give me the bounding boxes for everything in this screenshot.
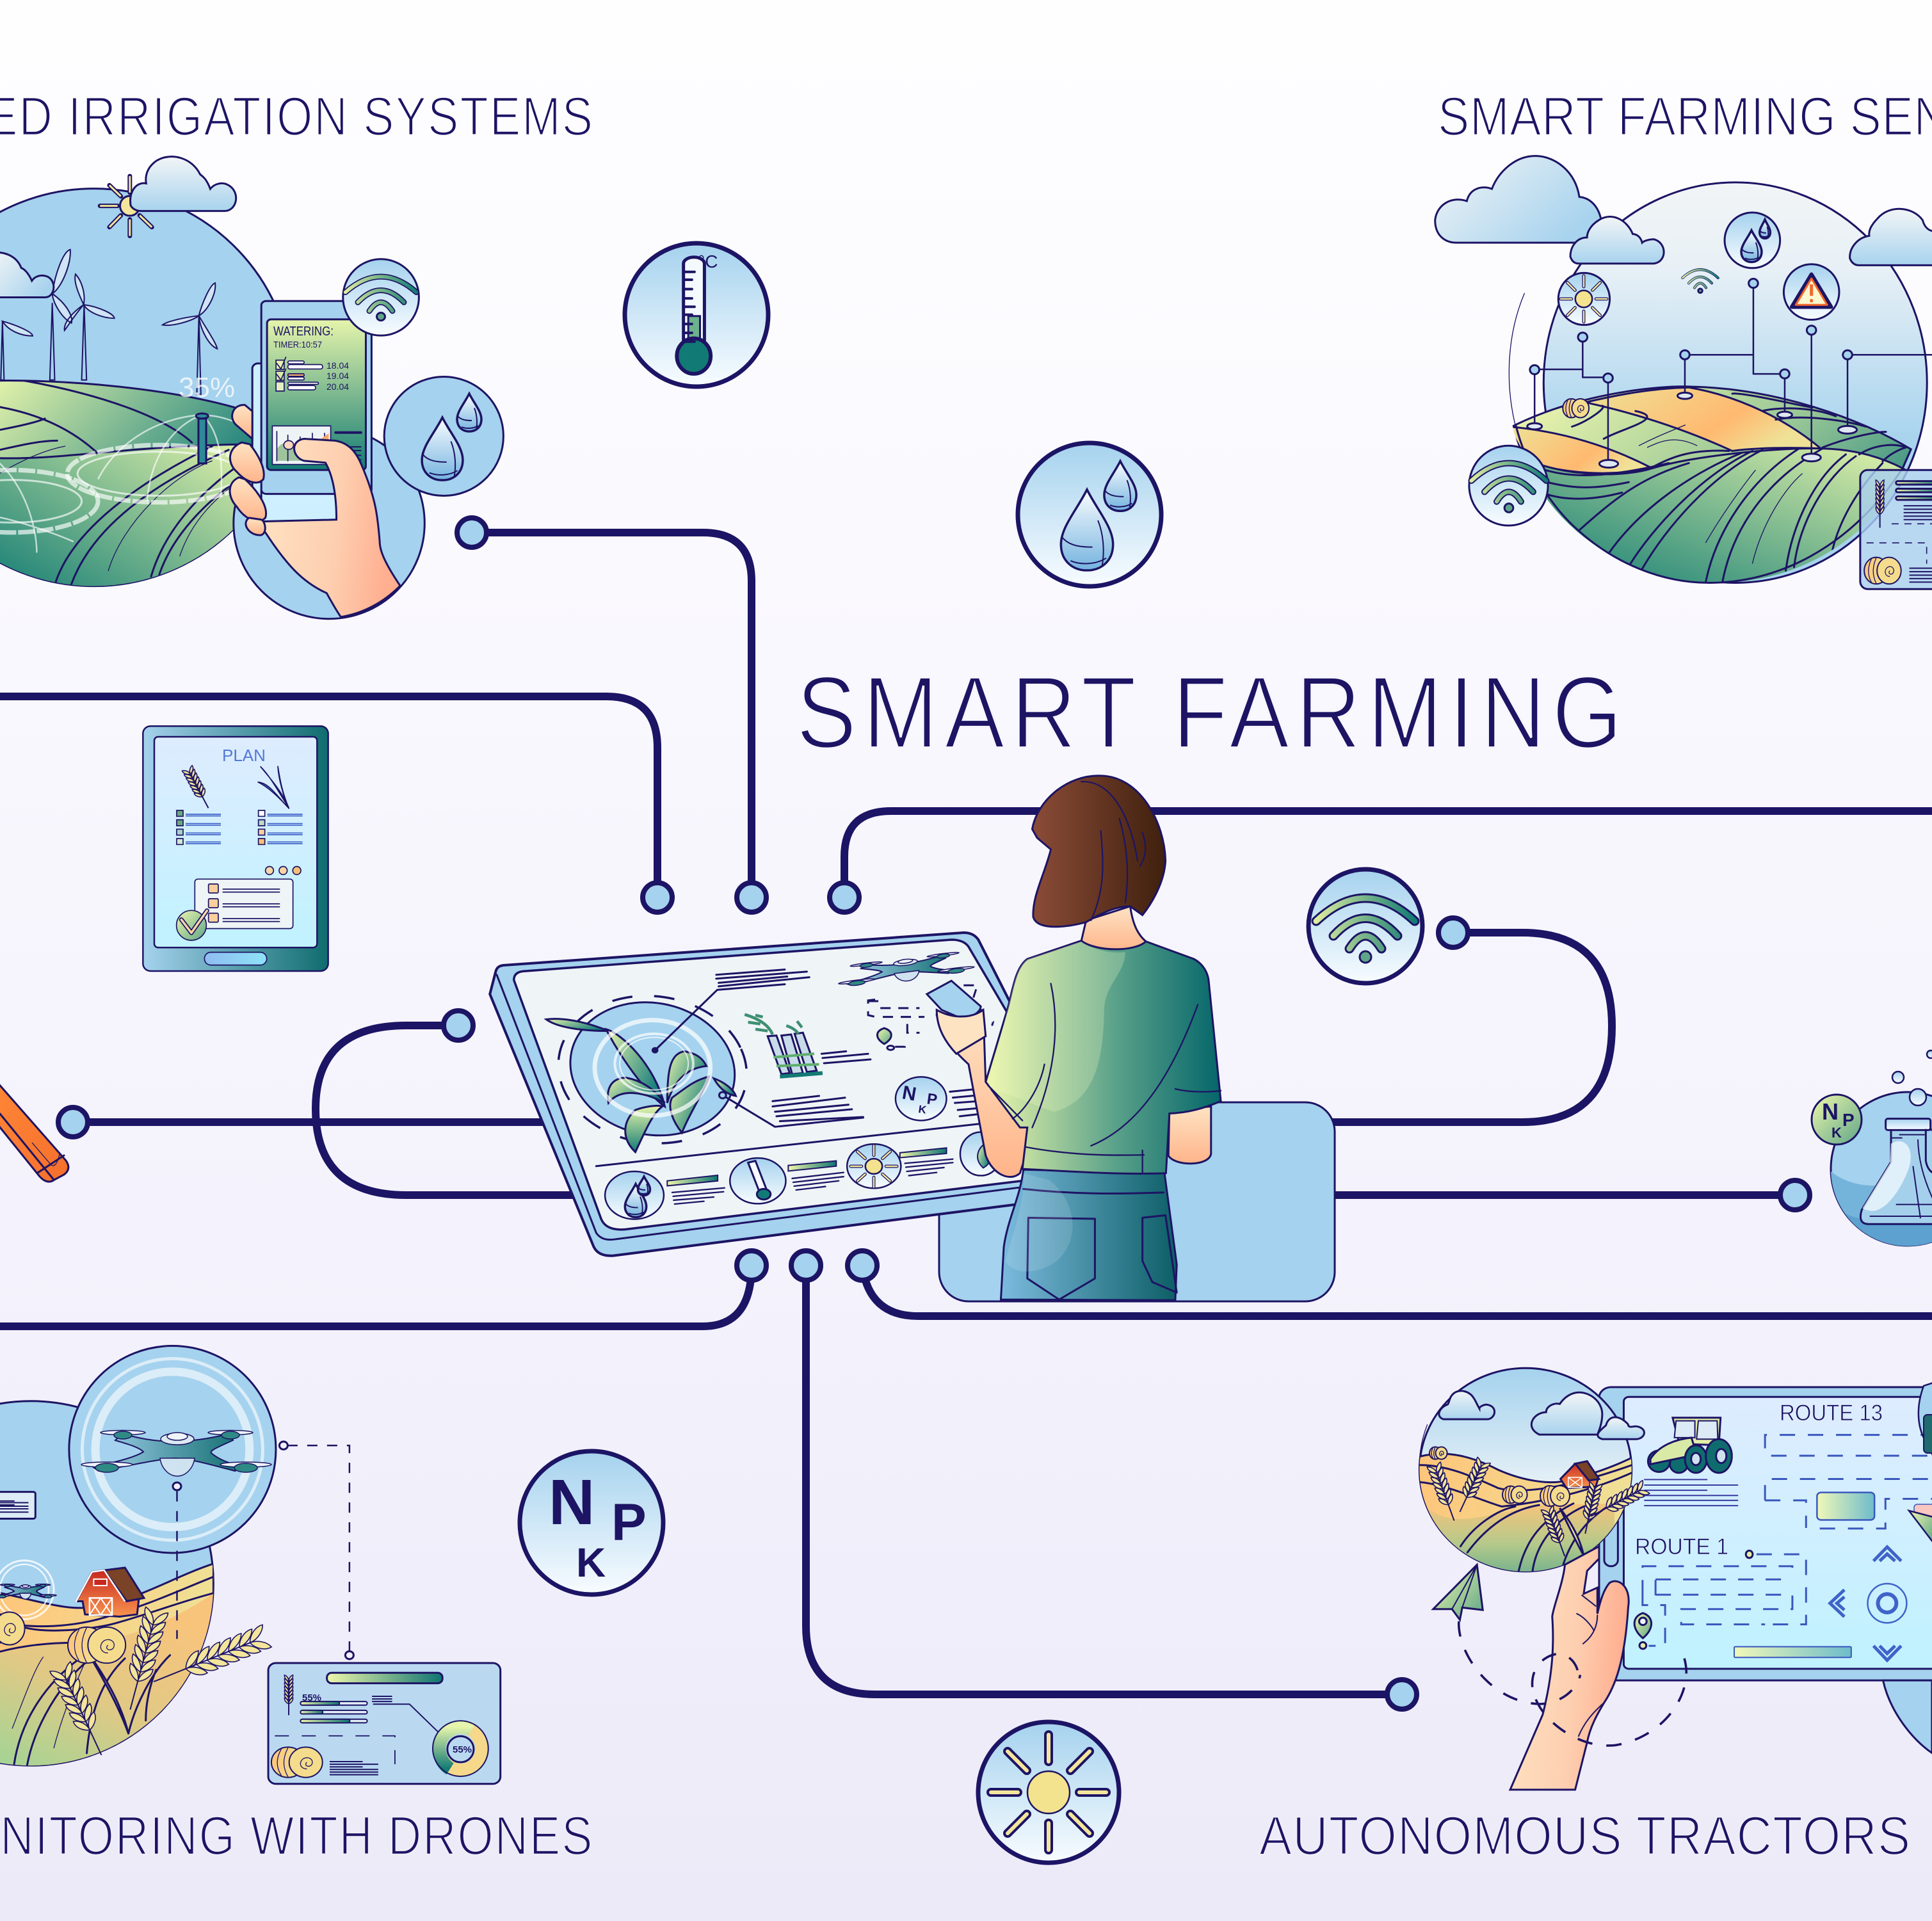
check badge <box>177 910 207 940</box>
wheat glyph <box>182 766 213 811</box>
sun with moon <box>100 176 152 236</box>
flask shape right <box>1926 1130 1932 1178</box>
panel: planning tablet <box>143 726 328 971</box>
farmer hair <box>1032 776 1166 927</box>
heading: main title: SMART FARMING <box>796 655 1622 769</box>
tablet frame <box>143 726 328 971</box>
hay bales <box>1429 1447 1570 1506</box>
deepest tone <box>1845 1214 1932 1246</box>
data card <box>268 1663 501 1784</box>
phone screen <box>267 319 366 470</box>
badge: drops <box>1725 213 1780 268</box>
screen badge drop icons <box>625 1177 650 1218</box>
icon: thermometer badge: °C <box>698 252 718 271</box>
flask body <box>1860 1130 1932 1224</box>
small drone rings <box>0 1561 54 1620</box>
phone text: 19.04 <box>326 371 349 381</box>
tablet edge <box>497 975 1027 1240</box>
wheat stalks <box>50 1607 271 1760</box>
NPK disc text: P <box>926 1090 938 1109</box>
wheat on scene <box>1427 1457 1650 1559</box>
hand creases <box>1577 1595 1604 1736</box>
top cloud <box>131 157 236 211</box>
bottom badge thermometer <box>730 1158 785 1203</box>
progress bar <box>1734 1647 1851 1657</box>
plan label: PLAN <box>222 746 266 765</box>
icon: thermometer badge <box>625 243 768 387</box>
icon: NPK badge: P <box>611 1493 647 1552</box>
drops badge <box>384 376 503 495</box>
farmer shirt <box>986 941 1221 1173</box>
phone text: WATERING: <box>273 325 334 339</box>
route node <box>1746 1550 1753 1558</box>
grass glyph <box>258 766 289 808</box>
plant circle <box>547 987 759 1151</box>
card percent labels <box>302 1692 472 1755</box>
hay bale on hill <box>1563 399 1589 418</box>
irrigation spray rings <box>0 415 241 553</box>
flask circle <box>1831 1092 1932 1246</box>
divider <box>596 1124 978 1166</box>
flask highlight <box>1863 1141 1911 1211</box>
farmer arm right <box>1168 1106 1211 1164</box>
big cloud <box>1435 156 1601 243</box>
fields <box>0 1564 213 1769</box>
icon: sensor wifi large <box>1471 463 1547 512</box>
phone back <box>252 364 337 522</box>
heading: autonomous tractors: AUTONOMOUS TRACTORS <box>1259 1806 1910 1867</box>
hand on tablet <box>1510 1547 1629 1790</box>
blue hand circle <box>234 428 424 619</box>
icon: NPK badge: K <box>576 1539 606 1586</box>
NPK disc text <box>901 1082 938 1116</box>
icon: sensor wifi small <box>1682 269 1718 293</box>
dash nodes <box>173 1442 353 1659</box>
card dash <box>275 1736 395 1771</box>
icon: orange tool <box>0 1082 68 1182</box>
shirt highlight <box>988 942 1125 1112</box>
pointer lines <box>655 985 863 1127</box>
bottom text lines <box>672 1159 953 1204</box>
phone chart <box>272 426 331 465</box>
panel: monitoring with drones <box>0 1346 501 1784</box>
fields <box>1509 387 1922 584</box>
screen badge sun icon <box>851 1146 897 1187</box>
donut <box>433 1721 488 1776</box>
icon: NPK badge <box>520 1451 663 1595</box>
connector lines <box>0 518 1932 1709</box>
badge: warning <box>1783 264 1839 320</box>
icon: small drop <box>457 394 481 431</box>
map pin <box>877 1028 894 1050</box>
farmer hair neck <box>1081 906 1146 952</box>
outer tablet <box>1599 1387 1932 1680</box>
tractor <box>1648 1418 1732 1473</box>
phone body <box>261 301 371 494</box>
icon: sun badge <box>978 1722 1119 1863</box>
dots <box>266 867 301 874</box>
map pin <box>1634 1613 1652 1649</box>
wind turbines <box>1 250 217 395</box>
card wheat <box>284 1675 293 1715</box>
card lines <box>330 1696 442 1774</box>
tablet body <box>490 933 1027 1256</box>
right cloud <box>1850 209 1932 265</box>
barn <box>1561 1461 1599 1488</box>
dashed map <box>868 985 993 1047</box>
side slot <box>1604 1516 1618 1566</box>
card text lines <box>1904 506 1932 582</box>
card dashed route <box>1867 524 1932 564</box>
plant <box>546 1019 736 1152</box>
bottom bars <box>667 1148 947 1186</box>
icon: wifi badge <box>1308 869 1422 983</box>
phone text <box>273 325 349 392</box>
big drone <box>81 1430 271 1476</box>
screen drone <box>836 950 975 990</box>
fields <box>1416 1454 1635 1577</box>
pointer node <box>719 1092 726 1098</box>
check list right <box>259 810 303 844</box>
leaf mini <box>978 1145 990 1168</box>
phone bottom <box>261 486 337 531</box>
jeans details <box>1024 1189 1177 1299</box>
NPK small badge: K <box>1831 1125 1842 1141</box>
text lines <box>716 970 978 1121</box>
text lines <box>1645 1479 1737 1506</box>
route labels: ROUTE 13 <box>1780 1401 1883 1426</box>
hand phone <box>927 981 981 1019</box>
card bars <box>300 1701 367 1723</box>
icon: water drops badge <box>1018 443 1161 586</box>
info lines <box>0 1501 28 1512</box>
NPK disc <box>896 1077 947 1120</box>
clouds <box>1439 1391 1644 1439</box>
icon: wifi <box>346 277 416 321</box>
sky circle <box>1543 182 1927 583</box>
phone small lines <box>345 447 361 460</box>
sky scene circle <box>1419 1368 1632 1571</box>
route dashes <box>1765 1435 1932 1529</box>
tablet screen <box>154 737 317 947</box>
NPK small badge: P <box>1842 1110 1855 1130</box>
NPK small badge: N <box>1822 1098 1839 1125</box>
big drone circle <box>69 1346 276 1553</box>
outline arc <box>1419 1424 1428 1479</box>
check list left <box>177 810 221 844</box>
small info card <box>0 1492 35 1518</box>
sky circle <box>0 189 293 586</box>
NPK disc text: N <box>901 1082 918 1105</box>
hair strands <box>1081 782 1145 920</box>
sky circle <box>0 1401 213 1765</box>
route 1 dashes <box>1643 1554 1806 1646</box>
test tubes <box>745 1015 823 1077</box>
NPK small badge <box>1812 1095 1862 1145</box>
card percent labels: 55% <box>302 1692 321 1703</box>
hay bales <box>0 1612 125 1663</box>
drone rings <box>82 1358 262 1540</box>
panel: autonomous tractors <box>1416 1368 1932 1790</box>
badge: wifi <box>1469 446 1548 526</box>
icon: sensor sun <box>1561 276 1607 322</box>
green pill <box>1817 1492 1874 1520</box>
label: moisture percent: 35% <box>179 372 235 403</box>
card bars <box>1896 481 1932 500</box>
lower tone <box>1831 1171 1932 1250</box>
sprinkler <box>198 419 206 463</box>
card percent labels: 55% <box>453 1744 472 1755</box>
panel: irrigation scene with phone <box>0 157 503 619</box>
tablet screen <box>514 940 1027 1230</box>
small drone <box>0 1584 56 1599</box>
phone text: TIMER:10:57 <box>273 339 322 350</box>
fingers on phone <box>937 1010 986 1054</box>
controls <box>1830 1547 1906 1660</box>
home button <box>204 952 267 965</box>
right edge badge <box>1919 1383 1932 1456</box>
small cloud <box>1570 217 1664 264</box>
icon: big drop <box>422 417 463 480</box>
stop tag and plane <box>1909 1504 1932 1543</box>
sensor poles and wiring <box>1527 279 1932 467</box>
shirt folds <box>988 984 1221 1173</box>
schedule rows <box>276 357 323 391</box>
scan rings <box>595 1020 711 1116</box>
flask collar <box>1886 1119 1931 1130</box>
task card <box>195 879 293 929</box>
data card <box>1860 470 1932 589</box>
thermometer mini <box>748 1161 771 1200</box>
badge: sun <box>1558 273 1610 325</box>
bottom badge leaf <box>960 1132 1001 1176</box>
warning triangle <box>1792 275 1831 307</box>
card top bar <box>327 1673 442 1684</box>
left cloud <box>0 253 54 297</box>
phone text: 20.04 <box>326 382 349 392</box>
route labels <box>1635 1401 1883 1559</box>
icon: sensor drops <box>1741 220 1770 262</box>
paper plane <box>1433 1564 1483 1620</box>
card bale <box>1864 558 1901 584</box>
route labels: ROUTE 1 <box>1635 1534 1728 1559</box>
wifi badge <box>343 259 419 335</box>
panel: flask and NPK at right <box>1812 1050 1932 1250</box>
desk box <box>939 1102 1335 1301</box>
panel: smart farming sensors <box>1435 156 1932 589</box>
card bale <box>271 1747 323 1778</box>
jeans highlight <box>1005 1173 1073 1271</box>
fields <box>0 380 252 586</box>
card wheat <box>1876 480 1884 528</box>
phone text: 18.04 <box>326 360 349 371</box>
bubble on top <box>1910 1089 1926 1105</box>
farmer arm left <box>937 1010 1034 1177</box>
phone side lines <box>335 431 361 434</box>
NPK disc text: K <box>917 1103 928 1116</box>
tablet screen <box>1623 1397 1932 1669</box>
bottom badge drop <box>605 1171 664 1219</box>
bottom badge sun <box>847 1144 901 1188</box>
ground outline <box>1516 426 1911 583</box>
outline arc <box>1509 293 1525 425</box>
lower blob <box>1883 1680 1932 1753</box>
dashed ring <box>532 978 773 1161</box>
barn <box>76 1568 144 1617</box>
dashed loops <box>1459 1621 1686 1746</box>
panel: central tablet and farmer <box>490 776 1221 1300</box>
hand holding phone <box>230 405 400 617</box>
icon: NPK badge: N <box>549 1467 595 1538</box>
bubbles <box>1892 1050 1932 1083</box>
flask lines <box>1870 1135 1932 1218</box>
dashed links <box>177 1445 350 1652</box>
farmer jeans <box>1001 1169 1177 1300</box>
